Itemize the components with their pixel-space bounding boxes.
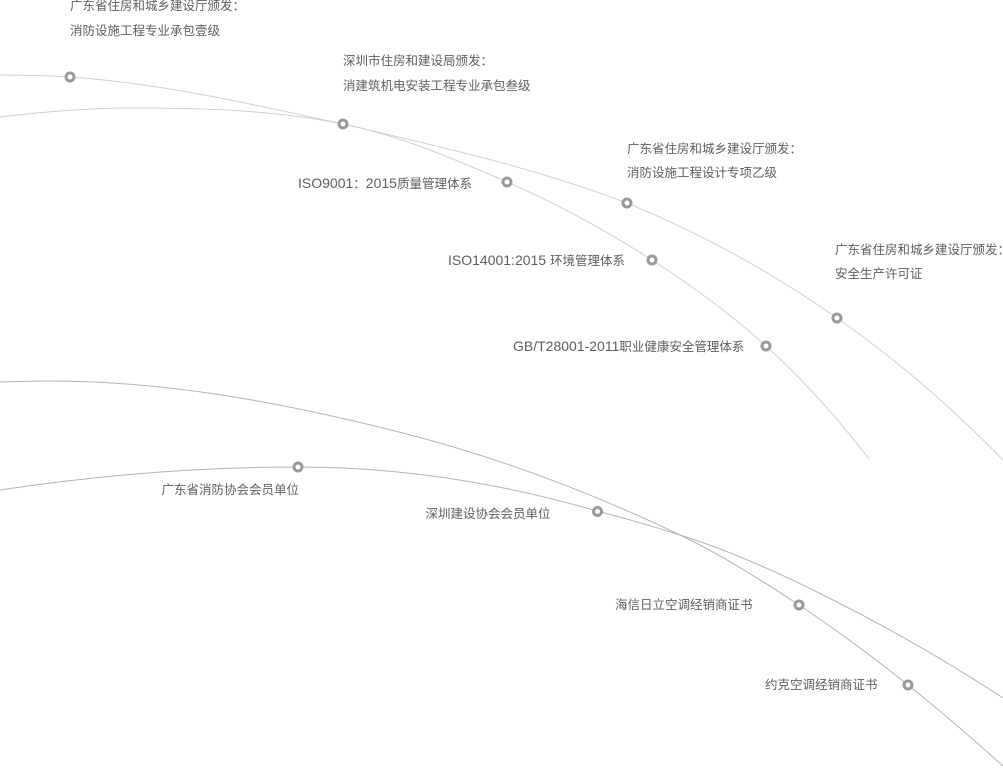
text: Shenzhen construction association: 深圳建设协会会员单位 bbox=[426, 507, 551, 521]
curve: upper outer arc bbox=[0, 75, 1003, 460]
text: safety production permit bbox=[835, 243, 1003, 281]
text: Guangdong fire design grade B bbox=[627, 142, 802, 180]
text: Guangdong fire association: 广东省消防协会会员单位 bbox=[162, 483, 299, 497]
text: Shenzhen electromechanical grade 3 bbox=[343, 54, 531, 92]
text: safety production permit: 安全生产许可证 bbox=[835, 267, 923, 281]
text: Guangdong fire design grade B: 广东省住房和城乡建设厅颁发： bbox=[627, 142, 802, 156]
curve: lower outer arc bbox=[0, 381, 1003, 766]
text: Shenzhen electromechanical grade 3: 深圳市住房和建设局颁发： bbox=[343, 54, 493, 68]
curve: lower inner arc bbox=[0, 467, 1003, 698]
text: GB/T28001: GB/T28001-2011职业健康安全管理体系 bbox=[513, 338, 744, 354]
text: Guangdong fire design grade B: 消防设施工程设计专项乙级 bbox=[627, 166, 777, 180]
text: ISO9001: ISO9001：2015质量管理体系 bbox=[298, 175, 472, 191]
curve: upper inner arc bbox=[0, 108, 869, 459]
text: Shenzhen electromechanical grade 3: 消建筑机电安装工程专业承包叁级 bbox=[343, 78, 531, 92]
text: York dealer: 约克空调经销商证书 bbox=[765, 678, 878, 692]
text: Guangdong fire engineering grade 1 bbox=[70, 0, 245, 38]
marker dots bbox=[66, 73, 912, 689]
text: Hisense Hitachi dealer: 海信日立空调经销商证书 bbox=[615, 598, 753, 612]
text: ISO14001: ISO14001:2015 环境管理体系 bbox=[448, 252, 625, 268]
text: Guangdong fire engineering grade 1: 消防设施工程专业承包壹级 bbox=[70, 24, 220, 38]
